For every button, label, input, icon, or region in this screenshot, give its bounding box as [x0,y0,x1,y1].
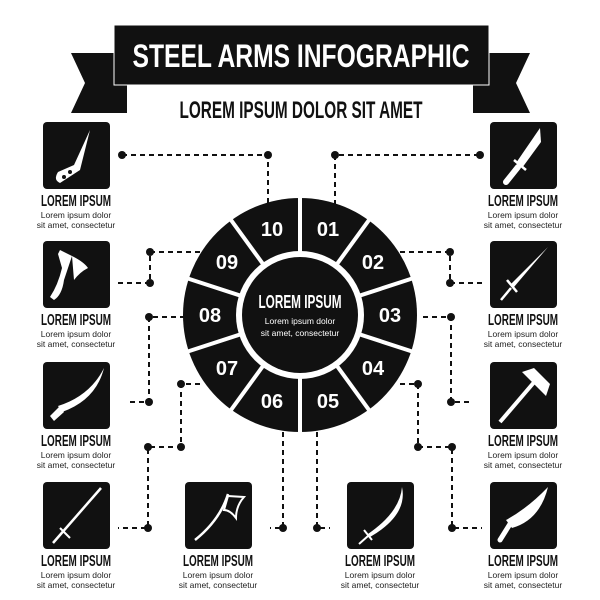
item: halberd: Lorem ipsum dolor [183,570,253,580]
item: saber: LOREM IPSUM [345,553,415,570]
item: combat knife: LOREM IPSUM [488,193,558,210]
item: axe [37,241,115,349]
item: machete [37,362,115,470]
item: katana: sit amet, consectetur [37,580,115,590]
item: knife top left: LOREM IPSUM [41,193,111,210]
ring chart: 06 [261,391,283,413]
item: knife top left [37,122,115,230]
ring chart: 05 [317,391,339,413]
banner [71,25,530,113]
center text: LOREM IPSUM [258,292,342,312]
item: saber [341,482,419,590]
ring chart: 10 [261,219,283,241]
item: combat knife: Lorem ipsum dolor [488,210,558,220]
item: machete: sit amet, consectetur [37,460,115,470]
ring chart: 03 [379,305,401,327]
item: katana: Lorem ipsum dolor [41,570,111,580]
item: katana [37,482,115,590]
ring chart: 09 [216,252,238,274]
item: sword: LOREM IPSUM [488,312,558,329]
item: axe: Lorem ipsum dolor [41,329,111,339]
item: sword: Lorem ipsum dolor [488,329,558,339]
ring chart: 02 [362,252,384,274]
title: STEEL ARMS INFOGRAPHIC [132,38,470,74]
item: hammer [484,362,562,470]
ring chart: 08 [199,305,221,327]
item: saber: Lorem ipsum dolor [345,570,415,580]
item: halberd: sit amet, consectetur [179,580,257,590]
item: combat knife: sit amet, consectetur [484,220,562,230]
ring chart: 07 [216,358,238,380]
item: knife top left: Lorem ipsum dolor [41,210,111,220]
item: kukri: LOREM IPSUM [488,553,558,570]
item: kukri [484,482,562,590]
item: hammer: Lorem ipsum dolor [488,450,558,460]
item: hammer: sit amet, consectetur [484,460,562,470]
item: combat knife [484,122,562,230]
item: machete: Lorem ipsum dolor [41,450,111,460]
item: saber: sit amet, consectetur [341,580,419,590]
item: halberd [179,482,257,590]
ring chart [183,195,417,435]
connectors [118,151,484,532]
subtitle: LOREM IPSUM DOLOR SIT AMET [180,97,423,124]
item: sword [484,241,562,349]
item: machete: LOREM IPSUM [41,433,111,450]
item: sword: sit amet, consectetur [484,339,562,349]
item: halberd: LOREM IPSUM [183,553,253,570]
item: knife top left: sit amet, consectetur [37,220,115,230]
item: axe: LOREM IPSUM [41,312,111,329]
ring chart: Lorem ipsum dolor [265,316,335,326]
item: axe: sit amet, consectetur [37,339,115,349]
item: kukri: Lorem ipsum dolor [488,570,558,580]
ring chart: 01 [317,219,339,241]
item: kukri: sit amet, consectetur [484,580,562,590]
item: hammer: LOREM IPSUM [488,433,558,450]
ring chart: sit amet, consectetur [261,328,339,338]
ring chart: 04 [362,358,385,380]
item: katana: LOREM IPSUM [41,553,111,570]
